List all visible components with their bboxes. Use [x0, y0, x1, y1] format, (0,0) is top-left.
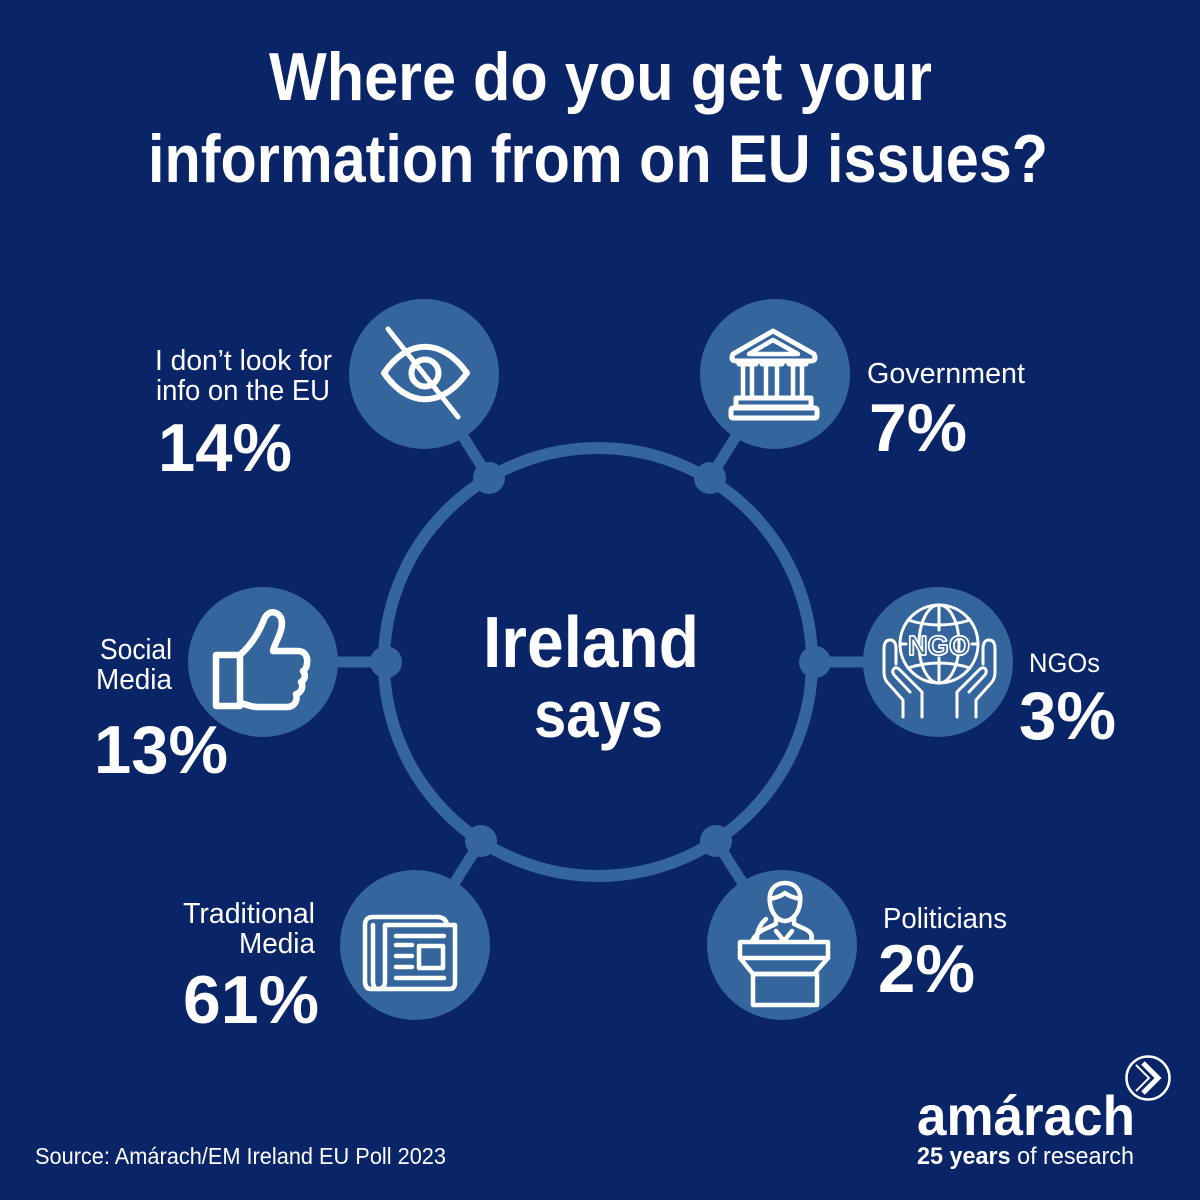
title: Where do you get your — [269, 39, 932, 115]
logo: amárach: amárach — [917, 1084, 1135, 1147]
panel: Social Media — [94, 587, 338, 788]
icon: government building — [731, 331, 817, 418]
label — [94, 634, 228, 788]
label: I don’t look for — [155, 345, 332, 377]
panel: Politicians — [707, 870, 1007, 1020]
icon: crossed eye — [384, 329, 467, 417]
label: 61% — [183, 962, 319, 1038]
centre label — [483, 603, 699, 751]
panel: Traditional Media — [183, 870, 490, 1038]
title — [148, 39, 1048, 197]
panel: NGOs — [863, 587, 1116, 754]
logo: amárach: 25 years of research — [917, 1143, 1134, 1170]
label: Politicians — [883, 903, 1007, 935]
label: info on the EU — [156, 375, 330, 407]
centre label: says — [534, 677, 663, 751]
label — [155, 345, 332, 486]
central ring with connectors — [263, 374, 938, 945]
icon: hands holding NGO globe — [884, 605, 995, 717]
label: Traditional — [183, 898, 315, 930]
logo: amárach — [917, 1056, 1170, 1170]
label — [878, 903, 1007, 1007]
label: NGOs — [1029, 648, 1100, 678]
label — [867, 358, 1025, 466]
label: 13% — [94, 712, 228, 788]
panel: Government — [700, 299, 1025, 466]
label — [183, 898, 319, 1038]
label: Media — [96, 664, 173, 696]
source note: Source: Amárach/EM Ireland EU Poll 2023 — [35, 1143, 446, 1169]
panel: I don't look for info — [155, 299, 499, 486]
label: 7% — [869, 390, 967, 466]
title: information from on EU issues? — [148, 121, 1048, 197]
label: Media — [239, 928, 316, 960]
centre label: Ireland — [483, 603, 699, 683]
icon: thumbs up — [216, 612, 307, 707]
label: 2% — [878, 931, 975, 1007]
label: 3% — [1019, 678, 1116, 754]
label: Government — [867, 358, 1025, 390]
icon: politician at podium — [740, 883, 828, 1005]
label: Social — [100, 634, 172, 666]
icon: newspaper — [365, 917, 455, 989]
label: 14% — [158, 410, 292, 486]
icon: hands holding NGO globe: NGO — [908, 630, 970, 661]
